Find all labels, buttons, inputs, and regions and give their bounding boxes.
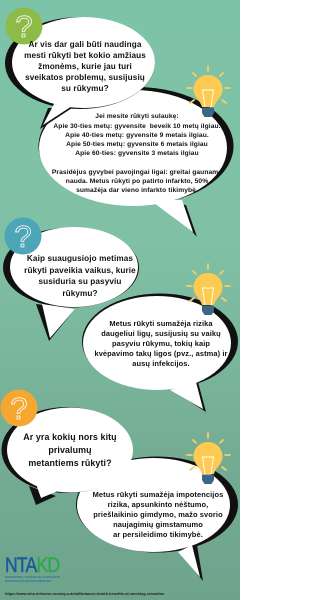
logo: NTAKD: KONTROLĖS DEPARTAMENTAS xyxy=(5,578,51,582)
question 2 text: Kaip suaugusiojo metimas xyxy=(27,254,133,263)
question 3 text: Ar yra kokių nors kitų xyxy=(23,432,117,442)
answer 2 text: Metus rūkyti sumažėja rizika xyxy=(109,319,213,328)
question 1 text: su rūkymu? xyxy=(61,84,109,92)
answer 3 text: naujagimių gimstamumo xyxy=(113,520,203,529)
answer 1 text: nauda. Metus rūkyti po patirto infarkto, 50% xyxy=(66,178,208,185)
answer 1 text: Prasidėjus gyvybei pavojingai ligai: greitai gaunama xyxy=(52,169,222,176)
bubble 2 xyxy=(38,87,234,237)
bubble 6 xyxy=(76,456,238,581)
question 1 text: sveikatos problemų, susijusių xyxy=(25,72,145,82)
question 2 text: rūkymu? xyxy=(62,289,98,298)
icon: light bulb 2 xyxy=(187,264,230,315)
icon: blue question: ? xyxy=(14,219,32,254)
bubble 1 xyxy=(5,17,155,129)
icon: orange question xyxy=(0,390,38,426)
answer 2 text: pasyviu rūkymu, tokių kaip xyxy=(112,339,210,348)
question 3 text: metantiems rūkyti? xyxy=(28,458,112,468)
question 3 text xyxy=(23,432,117,468)
icon: light bulb 3 xyxy=(187,433,230,484)
question 2 text xyxy=(24,254,136,298)
speech bubbles and icons xyxy=(0,8,238,581)
answer 3 text: priešlaikinio gimdymo, mažo svorio xyxy=(93,510,223,519)
icon: green question: ? xyxy=(15,9,33,44)
icon: orange question: ? xyxy=(10,391,28,426)
question 3 text: privalumų xyxy=(48,444,92,454)
answer 1 text: Apie 30-ties metų: gyvensite beveik 10 metų ilgiau. xyxy=(53,123,221,130)
logo: NTAKD: NTAKD xyxy=(5,554,59,577)
question 2 text: susiduria su pasyviu xyxy=(38,277,122,286)
icon: blue question xyxy=(4,218,42,254)
answer 2 text: kvėpavimo takų ligos (pvz., astma) ir xyxy=(94,349,228,358)
answer 2 text xyxy=(94,319,228,368)
answer 3 text: rizika, apsunkinto nėštumo, xyxy=(108,500,208,509)
logo: NTAKD: NARKOTIKŲ, TABAKO IR ALKOHOLIO xyxy=(5,574,60,578)
answer 3 text xyxy=(93,490,223,539)
answer 1 text: Apie 50-ties metų: gyvensite 6 metais ilgiau xyxy=(66,141,208,148)
question 1 text: mesti rūkyti bet kokio amžiaus xyxy=(24,50,146,60)
answer 1 text: Apie 40-ties metų: gyvensite 9 metais ilgiau. xyxy=(65,132,209,139)
question 1 text: žmonėms, kurie jau turi xyxy=(38,62,132,70)
source url: https://www.who.int/news-room/q-a-detail/tobacco-health-benefits-of-smoking-cessation xyxy=(5,592,164,596)
icon: green question xyxy=(6,8,42,44)
question 2 text: rūkyti paveikia vaikus, kurie xyxy=(24,266,136,275)
question 1 text: Ar vis dar gali būti naudinga xyxy=(28,40,142,48)
answer 3 text: ar persileidimo tikimybė. xyxy=(113,530,203,539)
bubble 4 xyxy=(82,294,238,412)
answer 1 text: Jei mesite rūkyti sulaukę: xyxy=(95,113,179,120)
icon: light bulb 1 xyxy=(187,66,230,117)
answer 1 text xyxy=(52,113,222,194)
answer 1 text: sumažėja dar vieno infarkto tikimybė. xyxy=(76,187,198,194)
bubble 3 xyxy=(3,227,139,341)
answer 2 text: daugeliui ligų, susijusių su vaikų xyxy=(101,329,221,338)
answer 2 text: ausų infekcijos. xyxy=(132,359,190,368)
answer 1 text: Apie 60-ties: gyvensite 3 metais ilgiau xyxy=(75,150,199,157)
answer 3 text: Metus rūkyti sumažėja impotencijos xyxy=(93,490,223,499)
bubble 5 xyxy=(2,407,133,505)
question 1 text xyxy=(24,40,146,92)
